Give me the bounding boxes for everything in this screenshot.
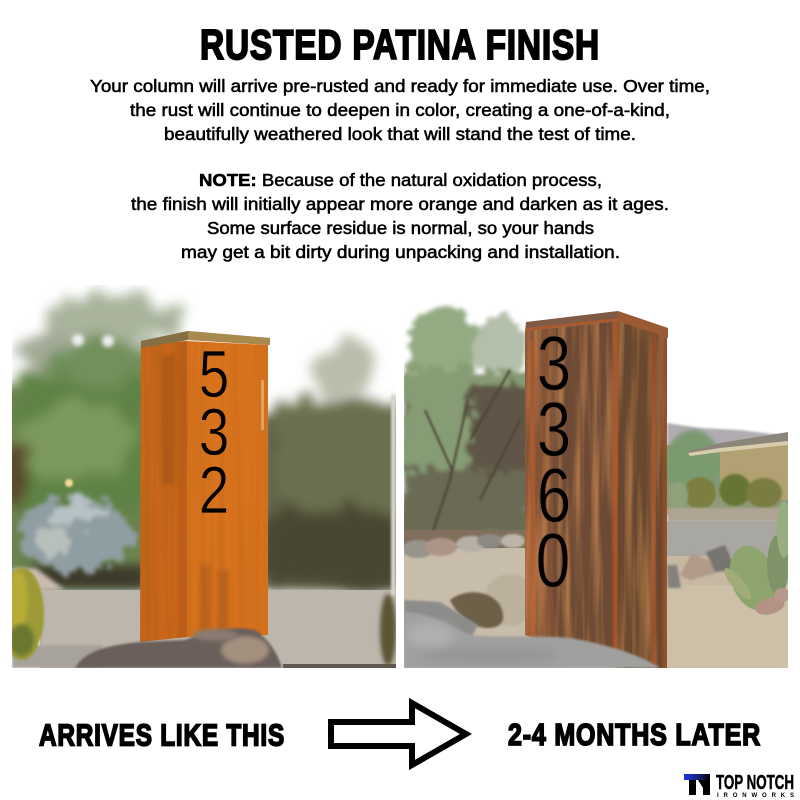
title: RUSTED PATINA FINISH — [200, 21, 600, 68]
text block: note: the finish will initially appear more orange and darken as it ages. — [131, 194, 669, 214]
foreground boulder — [404, 612, 660, 668]
panel: new column photo — [0, 285, 407, 668]
house number 3360: 3 — [537, 386, 571, 473]
left face of orange column — [140, 341, 187, 642]
text block: intro — [90, 76, 710, 144]
background: gravel ground — [404, 530, 788, 668]
background: small rocks — [402, 534, 525, 558]
house number 532: 5 — [199, 337, 229, 411]
text block: note — [131, 170, 669, 262]
house number 3360 — [538, 336, 568, 588]
arrow — [331, 703, 466, 765]
icon: logo mark — [684, 774, 710, 795]
panel: aged column photo — [402, 285, 791, 671]
logo: Top Notch Ironworks — [684, 772, 794, 799]
background: desert shrub — [404, 305, 530, 540]
background: driveway and gravel — [12, 568, 396, 668]
house number 532: 3 — [199, 395, 229, 469]
text block: note: may get a bit dirty during unpacking and installation. — [181, 242, 620, 262]
icon: barrel cactus — [12, 566, 46, 662]
text block: intro: beautifully weathered look that will stand the test of time. — [164, 124, 636, 144]
side face of aged column — [618, 320, 668, 670]
house number 3360: 3 — [537, 320, 571, 407]
text block: note: Some surface residue is normal, so your hands — [207, 218, 594, 238]
aged column cap — [525, 311, 668, 338]
text block: intro: the rust will continue to deepen in color, creating a one-of-a-kind, — [130, 100, 670, 120]
front face of aged column — [522, 318, 620, 671]
background: mountains and house — [665, 423, 788, 588]
house number 3360: 0 — [536, 517, 570, 604]
column cap — [141, 331, 270, 348]
background: blurred garden foliage — [0, 296, 407, 590]
foreground rocks, back — [404, 574, 536, 640]
label: arrives like this: ARRIVES LIKE THIS — [39, 718, 285, 752]
logo subtitle: IRONWORKS — [717, 793, 794, 799]
house number 532 — [200, 350, 227, 514]
text block: note: NOTE: Because of the natural oxidation process, — [199, 170, 602, 190]
house number 532: 2 — [199, 453, 229, 527]
text block: intro: Your column will arrive pre-rusted and ready for immediate use. Over time, — [90, 76, 710, 96]
foreground rock — [75, 628, 282, 668]
icon: prickly pear cactus — [724, 502, 788, 615]
right face of orange column — [187, 340, 269, 638]
house number 3360: 6 — [537, 452, 571, 539]
